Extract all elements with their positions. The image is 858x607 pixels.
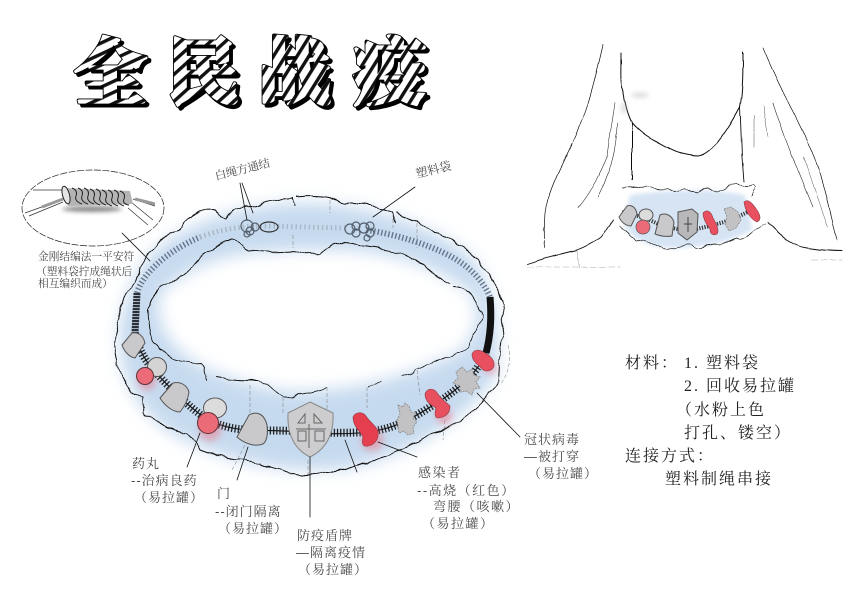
- title: 民: [170, 36, 243, 117]
- label: door: --闭门隔离: [215, 504, 282, 519]
- braided knot: [60, 185, 133, 206]
- label: medicine: （易拉罐）: [134, 490, 204, 505]
- bead: shield: [288, 402, 333, 457]
- title: 全: [77, 36, 150, 117]
- label: shield: [296, 528, 368, 577]
- text block: materials and connection: 材料：: [625, 354, 679, 372]
- leader lines: [122, 183, 520, 517]
- title: 战: [258, 33, 331, 114]
- blue plastic band: [119, 203, 498, 470]
- label: knot technique: [36, 250, 135, 290]
- text block: materials and connection: （水粉上色: [676, 401, 766, 419]
- label: knot technique: （塑料袋拧成绳状后: [36, 265, 133, 278]
- label: coronavirus: [524, 432, 598, 481]
- label: infected person: （易拉罐）: [422, 516, 495, 531]
- text block: materials and connection: 打孔、镂空）: [684, 424, 792, 442]
- bead: infected person 2: [425, 389, 450, 418]
- title: 全: [74, 33, 147, 114]
- mini necklace: [619, 185, 765, 248]
- title: 疫: [356, 36, 429, 117]
- label: shield: （易拉罐）: [298, 562, 368, 577]
- bead: infected person 3: [472, 350, 494, 371]
- bead: pill 2: [198, 398, 226, 434]
- label: knot technique: 相互编织而成）: [38, 277, 113, 290]
- bead: pill 1: [136, 358, 166, 384]
- label: rope knot note: 白绳方通结: [213, 156, 272, 183]
- panel: bracelet illustration: [115, 156, 598, 577]
- label: infected person: --高烧（红色）: [417, 483, 516, 498]
- front rope: dark coiled cord: [135, 293, 491, 434]
- label: coronavirus: —被打穿: [524, 449, 580, 464]
- text block: materials and connection: 连接方式：: [625, 447, 715, 465]
- panel: knot detail inset: [22, 170, 164, 290]
- label: shield: —隔离疫情: [296, 545, 366, 560]
- text block: materials and connection: 塑料制绳串接: [665, 470, 773, 488]
- faint smudges: [621, 92, 649, 114]
- knot shadow: [62, 206, 122, 212]
- bead: door 3: [237, 413, 267, 445]
- title: [74, 33, 429, 117]
- panel: worn on neck sketch: [527, 45, 842, 268]
- mini beads: [619, 205, 637, 226]
- bead: door 1: [122, 333, 145, 358]
- title: 全: [74, 33, 147, 114]
- neck and shoulder lines: [527, 45, 842, 268]
- label: door: （易拉罐）: [218, 521, 288, 536]
- top rope: plastic bag braid: [137, 226, 490, 297]
- title: 疫: [353, 33, 426, 114]
- label: door: 门: [217, 486, 231, 501]
- label: medicine: 药丸: [132, 456, 160, 471]
- title: 战: [258, 33, 331, 114]
- rope tails: [25, 190, 155, 225]
- label: medicine: [131, 456, 204, 505]
- title: 民: [167, 33, 240, 114]
- title: 民: [167, 33, 240, 114]
- bead: virus 1: [397, 403, 417, 435]
- title: 战: [261, 36, 334, 117]
- bead: virus 2: [453, 367, 480, 395]
- label: coronavirus: （易拉罐）: [528, 466, 598, 481]
- title: 疫: [353, 33, 426, 114]
- red glows: [138, 362, 496, 451]
- rope label knot: white rope loop: [241, 220, 278, 237]
- text block: materials and connection: 2. 回收易拉罐: [684, 376, 796, 395]
- inner ruffle edge: [147, 240, 483, 397]
- fold lines in the band: [232, 200, 509, 475]
- label: door: [215, 486, 288, 536]
- label: shield: 防疫盾牌: [297, 528, 353, 543]
- bead: infected person 1: [353, 413, 378, 446]
- label: infected person: 感染者: [418, 465, 462, 480]
- label: infected person: 弯腰（咳嗽）: [433, 499, 520, 514]
- label: knot technique: 金刚结编法一平安符: [38, 250, 135, 263]
- label: plastic bag: 塑料袋: [414, 158, 453, 181]
- outer ruffle edge: [115, 196, 503, 475]
- text block: materials and connection: 1. 塑料袋: [684, 353, 760, 372]
- label: coronavirus: 冠状病毒: [524, 432, 580, 447]
- plastic bag flower knot: [345, 222, 374, 241]
- text block: materials and connection: [625, 353, 796, 488]
- bead: door 2: [160, 382, 189, 412]
- label: infected person: [417, 465, 520, 531]
- label: medicine: --治病良药: [131, 473, 198, 488]
